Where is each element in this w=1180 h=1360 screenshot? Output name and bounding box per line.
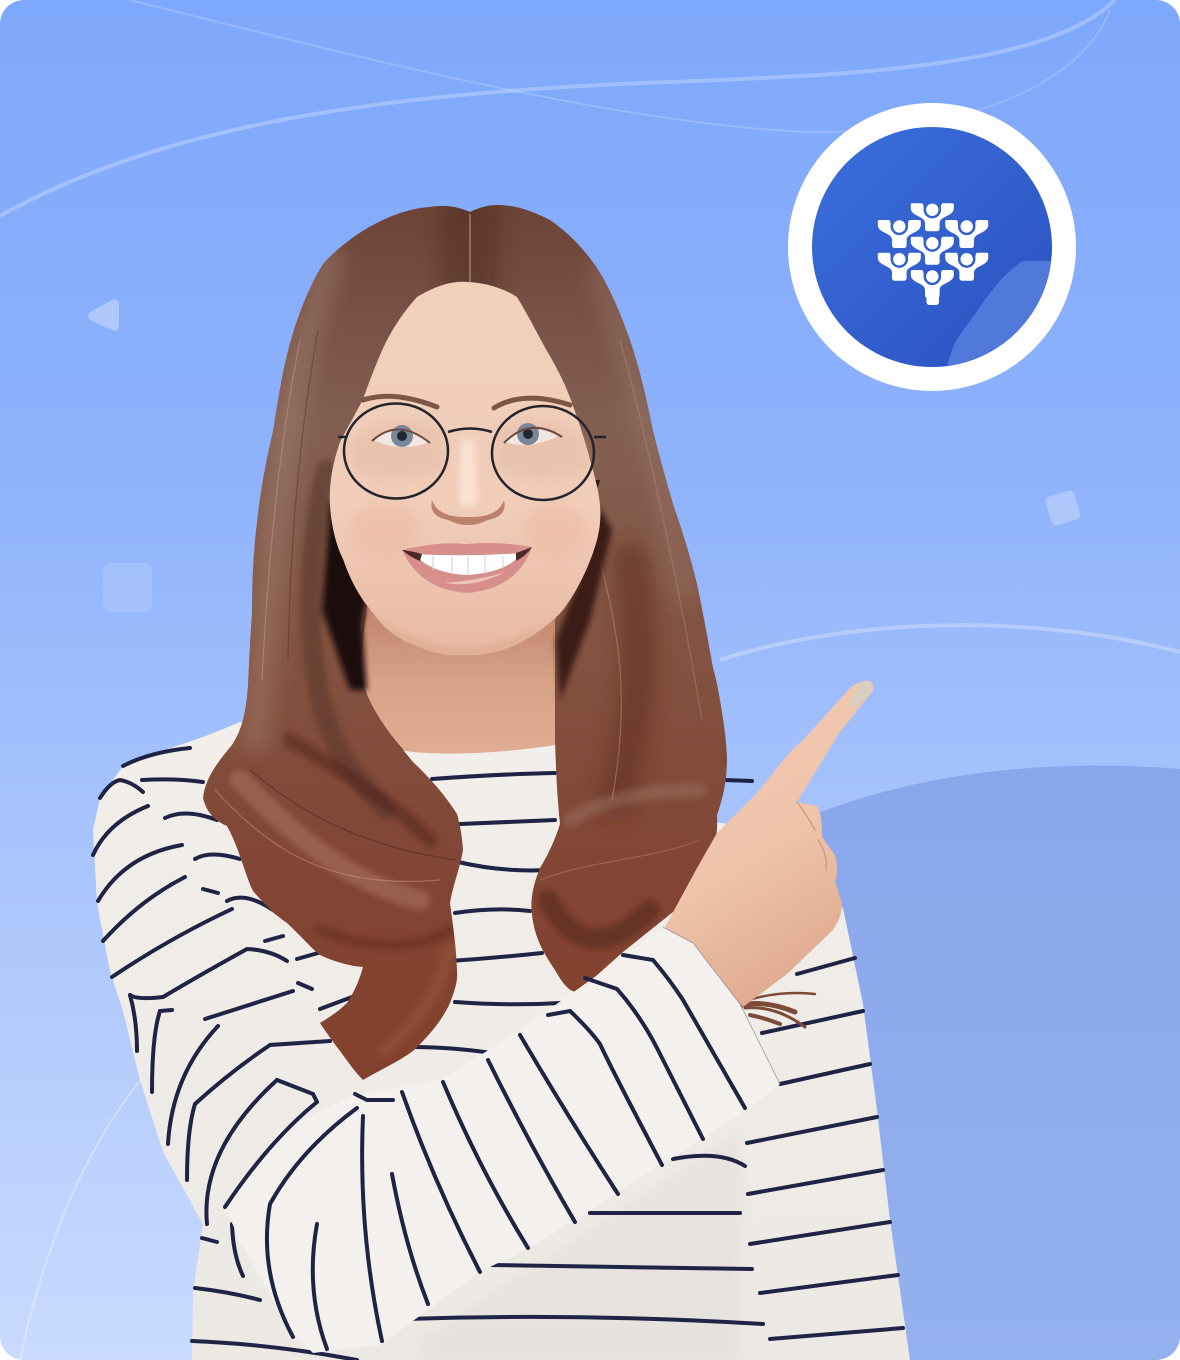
nose [431,440,505,525]
decorative rounded square left [103,563,152,612]
fingernail [850,682,872,707]
torso stripes [192,773,903,1360]
upper sleeve stripes [93,748,352,1276]
left eyebrow [363,396,437,407]
logo badge [788,103,1076,391]
face [330,214,606,658]
decorative triangle [88,299,119,331]
right eyebrow [494,398,570,408]
shadow hair behind neck [360,480,600,751]
hair [203,205,727,1080]
hand pointing [665,681,873,1007]
dark hair shadow right [556,505,612,700]
badge disc [812,127,1052,367]
hair strands [215,215,702,1050]
left eye socket shade [353,422,442,478]
background curved shape [820,766,1180,1360]
forearm stripes [225,955,745,1349]
woman [93,205,910,1360]
glasses [338,404,606,500]
chin shading [375,615,555,658]
left eye [372,425,430,447]
decorative rounded square right [1046,490,1080,526]
right eye [504,423,562,445]
neck [360,600,556,760]
cuff outline [663,927,780,1084]
finger creases [797,802,826,870]
dark hair shadow left [322,500,368,690]
hair wisps behind hand [740,993,815,1027]
badge ring [788,103,1076,391]
cheek blush [354,504,416,553]
hair parting [469,214,471,282]
smile [402,543,532,593]
logo tree of people [878,203,988,305]
right eye socket shade [495,420,590,480]
torso shade under arm [420,1130,740,1360]
badge corner highlight [946,261,1052,366]
sweater forearm [225,927,780,1353]
sweater torso [93,722,910,1360]
